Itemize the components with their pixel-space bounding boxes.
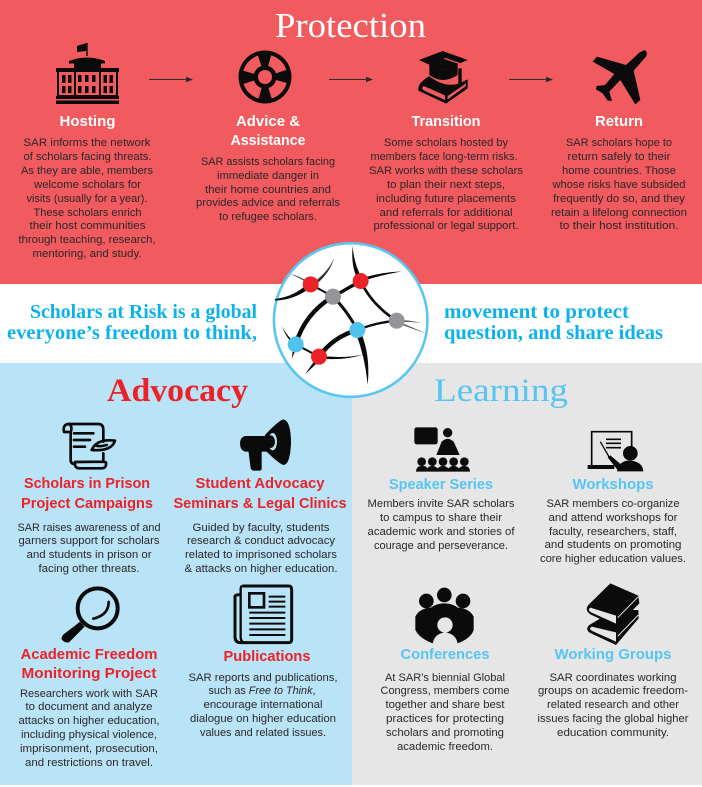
icon: megaphone xyxy=(240,419,291,471)
heading: Transition: Transition xyxy=(412,113,480,130)
column: advice and assistance xyxy=(196,113,340,223)
text: transition description: including future placements xyxy=(376,193,517,205)
text: speaker series description: courage and perseverance. xyxy=(374,540,508,552)
text: mission statement right xyxy=(444,301,663,344)
logo: network circle xyxy=(274,243,428,397)
title: Protection: Protection xyxy=(275,6,426,45)
title: Learning: Learning xyxy=(434,373,568,409)
heading: Scholars in Prison Project Campaigns: Project Campaigns xyxy=(21,495,153,512)
heading: Academic Freedom Monitoring Project: Monitoring Project xyxy=(22,665,156,682)
text: return description: home countries. Those xyxy=(562,165,676,177)
text: return description: whose risks have subsided xyxy=(551,179,686,191)
text: conferences description: scholars and promoting xyxy=(386,727,504,739)
text: mission statement left xyxy=(7,301,257,344)
text: return description: frequently do so, and they xyxy=(553,193,686,205)
text: publications description: values and related issues. xyxy=(200,727,326,739)
text: advice description: provides advice and referrals xyxy=(196,197,340,209)
item: conferences xyxy=(380,646,510,753)
column: transition xyxy=(369,113,524,232)
heading: Return: Return xyxy=(595,113,643,130)
text: student advocacy description: & attacks on higher education. xyxy=(184,563,338,575)
text: hosting description: visits (usually for a year). xyxy=(26,193,148,205)
text: academic freedom description xyxy=(18,688,160,769)
text: publications description: such as Free to Think, xyxy=(208,685,316,697)
heading: Student Advocacy Seminars and Legal Clinics xyxy=(174,475,346,512)
heading: Advice & Assistance: Advice & xyxy=(236,113,300,130)
text: mission statement right: question, and share ideas xyxy=(444,322,663,344)
text: student advocacy description: Guided by faculty, students xyxy=(192,522,330,534)
text: mission statement left: Scholars at Risk is a global xyxy=(30,301,257,323)
heading: Speaker Series: Speaker Series xyxy=(389,476,493,493)
item: scholars in prison xyxy=(18,475,160,575)
text: working groups description: related research and other xyxy=(547,699,679,711)
icon: airplane xyxy=(593,50,647,104)
text: return description: return safely to their xyxy=(568,151,671,163)
icon: presenter at board xyxy=(588,432,643,471)
text: return description: retain a lifelong connection xyxy=(551,207,687,219)
text: hosting description xyxy=(18,137,156,260)
text: working groups description: groups on academic freedom- xyxy=(538,685,688,697)
text: speaker series description: Members invite SAR scholars xyxy=(368,498,515,510)
text: hosting description: These scholars enrich xyxy=(34,207,142,219)
icon: stacked books xyxy=(587,583,639,645)
text: scholars in prison description xyxy=(18,522,160,575)
heading: Advice & Assistance: Assistance xyxy=(230,132,306,149)
heading: Scholars in Prison Project Campaigns: Scholars in Prison xyxy=(24,475,150,492)
text: advice description: their home countries and xyxy=(205,184,331,196)
heading: Student Advocacy Seminars and Legal Clinics: Seminars & Legal Clinics xyxy=(174,495,346,512)
item: working groups xyxy=(538,646,689,739)
text: publications description xyxy=(188,672,338,739)
heading: Academic Freedom Monitoring Project xyxy=(20,646,158,682)
column: hosting xyxy=(18,113,156,260)
text: conferences description xyxy=(380,672,510,753)
icon: speaker with audience xyxy=(414,427,470,472)
item: workshops xyxy=(540,476,686,565)
text: transition description: members face long-term risks. xyxy=(370,151,518,163)
panel: learning xyxy=(352,363,702,785)
text: publications description: encourage international xyxy=(204,699,322,711)
heading: Working Groups: Working Groups xyxy=(554,646,672,663)
heading: Academic Freedom Monitoring Project: Academic Freedom xyxy=(20,646,158,663)
item: academic freedom monitoring xyxy=(18,646,160,769)
heading: Hosting: Hosting xyxy=(60,113,116,130)
item: student advocacy xyxy=(174,475,346,575)
text: advice description xyxy=(196,156,340,223)
heading: Conferences: Conferences xyxy=(400,646,490,663)
text: workshops description: faculty, researchers, staff, xyxy=(549,526,677,538)
text: transition description: to plan their next steps, xyxy=(387,179,505,191)
text: academic freedom description: and restrictions on travel. xyxy=(25,757,153,769)
text: mission statement right: movement to protect xyxy=(444,301,629,323)
text: scholars in prison description: garners support for scholars xyxy=(18,535,160,547)
text: academic freedom description: Researchers work with SAR xyxy=(20,688,158,700)
text: working groups description: SAR coordinates working xyxy=(550,672,676,684)
text: workshops description: SAR members co-organize xyxy=(546,498,680,510)
icon: group of people xyxy=(415,588,474,644)
text: publications description: dialogue on higher education xyxy=(190,713,336,725)
heading: Student Advocacy Seminars and Legal Clinics: Student Advocacy xyxy=(196,475,325,492)
text: hosting description: As they are able, members xyxy=(21,165,153,177)
text: working groups description: issues facing the global higher xyxy=(538,713,689,725)
text: speaker series description: to campus to share their xyxy=(380,512,502,524)
icon: lifebuoy xyxy=(238,50,292,104)
text: return description: to their host institution. xyxy=(560,220,678,232)
text: conferences description: together and share best xyxy=(386,699,504,711)
text: student advocacy description xyxy=(184,522,338,575)
text: student advocacy description: related to imprisoned scholars xyxy=(185,549,338,561)
text: scholars in prison description: SAR raises awareness of and xyxy=(18,522,160,534)
text: transition description: Some scholars hosted by xyxy=(384,137,508,149)
text: hosting description: their host communities xyxy=(30,220,146,232)
text: conferences description: Congress, members come xyxy=(380,685,510,697)
text: workshops description: and attend workshops for xyxy=(548,512,678,524)
text: transition description: and referrals for additional xyxy=(380,207,512,219)
arrow: transition to return xyxy=(509,77,553,82)
panel: advocacy xyxy=(0,363,352,785)
item: speaker series xyxy=(368,476,515,552)
text: academic freedom description: imprisonment, prosecution, xyxy=(20,743,158,755)
text: workshops description: core higher education values. xyxy=(540,553,686,565)
text: conferences description: academic freedom. xyxy=(397,741,493,753)
text: advice description: SAR assists scholars facing xyxy=(201,156,335,168)
text: academic freedom description: attacks on higher education, xyxy=(18,715,160,727)
title: Advocacy: Advocacy xyxy=(107,373,249,409)
text: advice description: immediate danger in xyxy=(217,170,319,182)
icon: newspaper xyxy=(235,586,292,643)
text: academic freedom description: including physical violence, xyxy=(21,729,157,741)
text: return description xyxy=(551,137,687,232)
icon: magnifying glass xyxy=(62,588,118,643)
panel: protection xyxy=(0,0,702,284)
text: mission statement left: everyone’s freedom to think, xyxy=(7,322,257,344)
text: conferences description: At SAR’s biennial Global xyxy=(385,672,505,684)
text: speaker series description xyxy=(368,498,515,552)
heading: Advice & Assistance xyxy=(230,113,306,149)
text: return description: SAR scholars hope to xyxy=(566,137,672,149)
text: transition description: SAR works with these scholars xyxy=(369,165,524,177)
text: publications description: SAR reports and publications, xyxy=(188,672,338,684)
text: scholars in prison description: facing other threats. xyxy=(38,563,140,575)
heading: Workshops: Workshops xyxy=(572,476,654,493)
arrow: hosting to advice xyxy=(149,77,193,82)
text: hosting description: SAR informs the network xyxy=(24,137,151,149)
panel: mission statement band xyxy=(0,284,702,363)
heading: Publications: Publications xyxy=(224,648,310,665)
icon: scroll with quill xyxy=(64,424,115,468)
icon: university building xyxy=(56,43,119,104)
text: student advocacy description: research & conduct advocacy xyxy=(187,535,335,547)
text: working groups description: education community. xyxy=(557,727,669,739)
text: hosting description: of scholars facing threats. xyxy=(24,151,152,163)
icon: graduation cap on book xyxy=(418,51,468,104)
text: advice description: to refugee scholars. xyxy=(219,211,317,223)
text: hosting description: mentoring, and study. xyxy=(32,248,142,260)
text: working groups description xyxy=(538,672,689,739)
arrow: advice to transition xyxy=(329,77,373,82)
text: speaker series description: academic work and stories of xyxy=(368,526,515,538)
text: hosting description: through teaching, research, xyxy=(18,234,156,246)
text: scholars in prison description: and students in prison or xyxy=(26,549,152,561)
text: transition description xyxy=(369,137,524,232)
text: academic freedom description: to document and analyze xyxy=(26,701,152,713)
item: publications xyxy=(188,648,338,739)
text: workshops description: and students on promoting xyxy=(544,539,682,551)
text: workshops description xyxy=(540,498,686,565)
column: return xyxy=(551,113,687,232)
text: conferences description: practices for protecting xyxy=(386,713,504,725)
heading: Scholars in Prison Project Campaigns xyxy=(21,475,153,512)
text: hosting description: welcome scholars for xyxy=(33,179,141,191)
text: transition description: professional or legal support. xyxy=(374,220,518,232)
